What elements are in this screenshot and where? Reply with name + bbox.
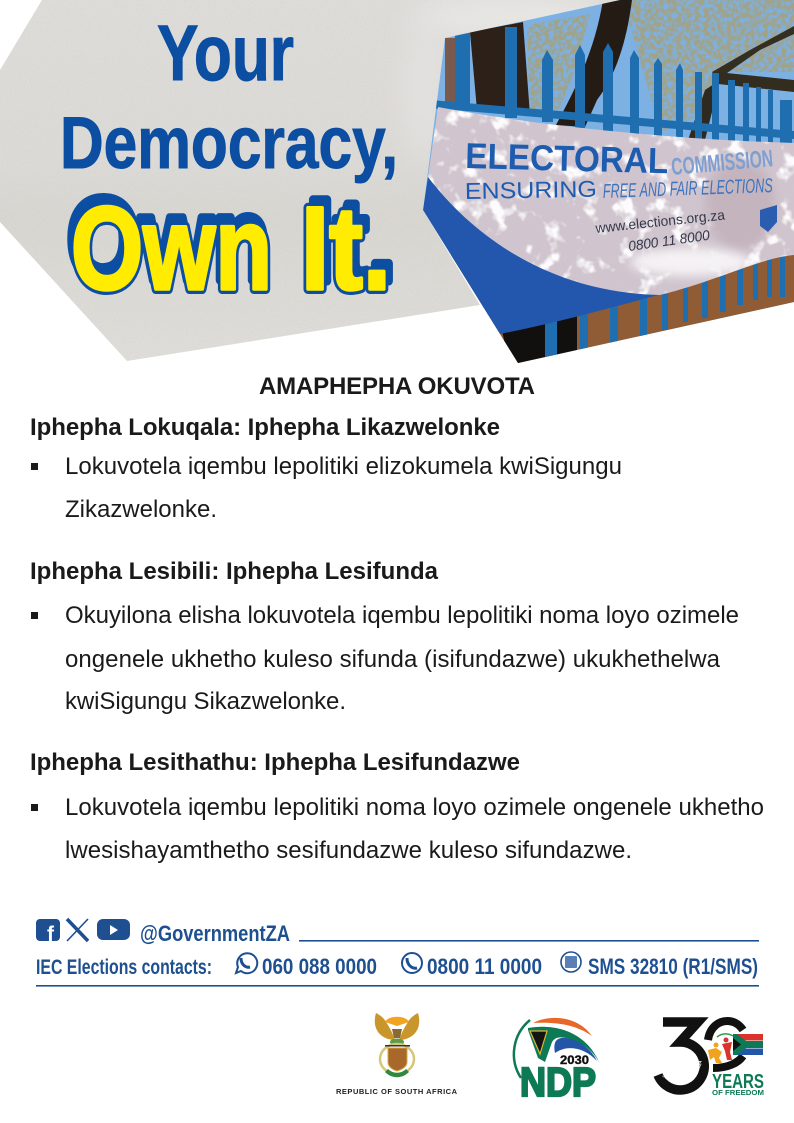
section 1 text: Zikazwelonke. [65, 496, 217, 523]
icon: facebook [36, 919, 60, 946]
section 2 text [65, 602, 739, 715]
section 3 bullet [31, 804, 38, 811]
photo background sky and trees [420, 0, 794, 370]
section 1 heading: Iphepha Lokuqala: Iphepha Likazwelonke [30, 414, 500, 441]
icon: youtube [97, 919, 130, 940]
section 3: provincial ballot [30, 749, 764, 864]
numeral zero [708, 1021, 743, 1068]
section 1 bullet [31, 463, 38, 470]
section 3 text [65, 794, 764, 864]
numeral three [658, 1022, 704, 1090]
whatsapp number: 060 088 0000 [262, 954, 377, 979]
section 1: national ballot [30, 414, 622, 523]
banner white body [428, 107, 794, 295]
banner text: 0800 11 8000 [627, 227, 711, 254]
concrete background panel [0, 0, 620, 361]
headline: Your Democracy, Own It.: Democracy, [60, 103, 398, 184]
IEC contacts label: IEC Elections contacts: [36, 956, 212, 979]
anniversary arc text: South Africa 1994 - 2024 [662, 1060, 702, 1079]
section 1 text: Lokuvotela iqembu lepolitiki elizokumela kwiSigungu [65, 453, 622, 480]
headline: Your Democracy, Own It. [60, 8, 398, 315]
title: AMAPHEPHA OKUVOTA [259, 373, 535, 400]
logo: coat of arms [336, 1013, 458, 1096]
logo: NDP 2030: NDP [520, 1059, 596, 1105]
icon: X [67, 919, 88, 941]
own it blue offset shadow: Own [67, 174, 270, 306]
logo: NDP 2030: 2030 [560, 1053, 589, 1067]
banner dappled shadows [425, 105, 794, 300]
social handle: @GovernmentZA [140, 921, 290, 946]
logo: NDP 2030 [514, 1018, 600, 1105]
section 3 text: Lokuvotela iqembu lepolitiki noma loyo ozimele ongenele ukhetho [65, 794, 764, 821]
flag [733, 1034, 763, 1055]
contact strip [36, 919, 759, 987]
photo: election banner on blue fence [420, 0, 794, 370]
section 1 text [65, 453, 622, 523]
own it yellow lettering: Own [71, 183, 272, 315]
own it blue outline: Own [71, 183, 272, 315]
arms emblem [375, 1013, 419, 1077]
icon: sms keypad [561, 952, 581, 972]
section 2 bullet [31, 612, 38, 619]
section 2 text: ongenele ukhetho kuleso sifunda (isifundazwe) ukukhethelwa [65, 646, 721, 673]
section 3 heading: Iphepha Lesithathu: Iphepha Lesifundazwe [30, 749, 520, 776]
icon: whatsapp [236, 953, 257, 973]
of freedom text: OF FREEDOM [712, 1088, 764, 1097]
section 3 text: lwesishayamthetho sesifundazwe kuleso sifundazwe. [65, 837, 632, 864]
fence bars [430, 27, 794, 365]
own it yellow lettering: It. [301, 183, 391, 315]
section 2 text: kwiSigungu Sikazwelonke. [65, 688, 346, 715]
banner text: www.elections.org.za [594, 206, 726, 236]
arms caption: REPUBLIC OF SOUTH AFRICA [336, 1087, 458, 1096]
banner text: ENSURING [465, 176, 597, 204]
section 2: regional ballot [30, 558, 739, 715]
icon: facebook: f [47, 923, 55, 946]
own it blue offset shadow: It. [306, 175, 396, 307]
banner blue swoosh [423, 177, 662, 334]
banner text: ELECTORAL [465, 135, 669, 181]
section 2 text: Okuyilona elisha lokuvotela iqembu lepolitiki noma loyo ozimele [65, 602, 739, 629]
own it blue outline: It. [301, 183, 391, 315]
icon: phone [402, 953, 422, 973]
phone number: 0800 11 0000 [427, 954, 542, 979]
section 2 heading: Iphepha Lesibili: Iphepha Lesifunda [30, 558, 439, 585]
headline: Your Democracy, Own It.: Your [157, 8, 294, 97]
logo: 30 years of freedom [654, 1017, 764, 1097]
banner text [465, 135, 777, 254]
years text: YEARS [712, 1071, 764, 1093]
people figures [708, 1034, 733, 1063]
